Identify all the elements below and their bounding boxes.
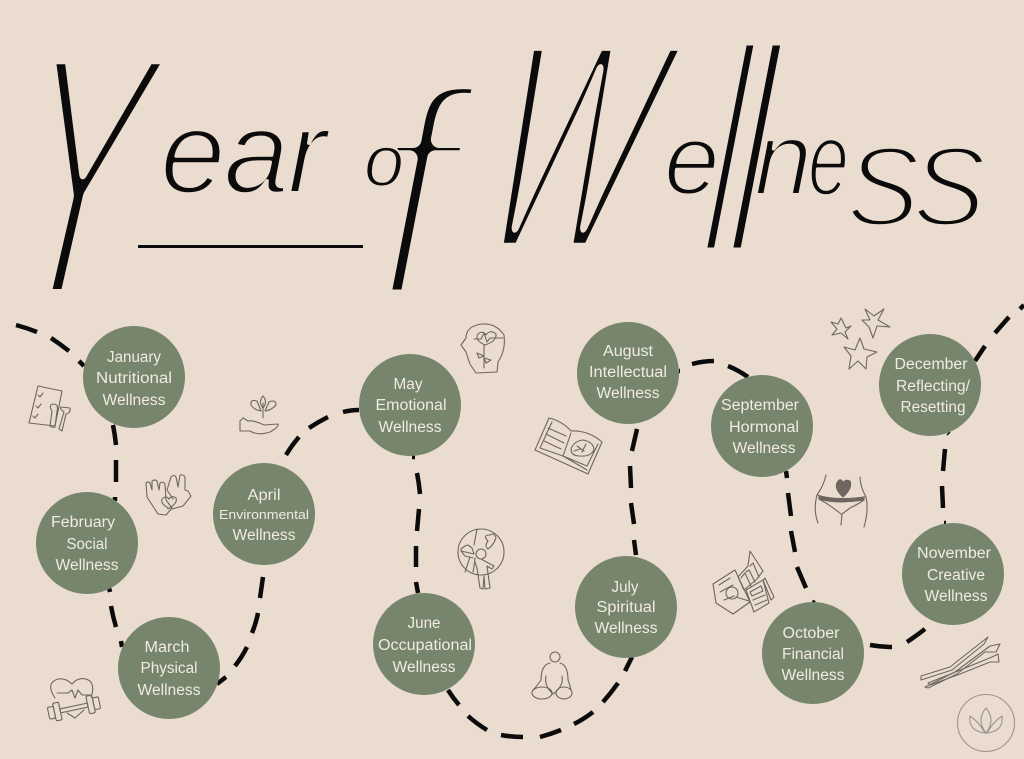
- step: July: Spiritual: [596, 599, 656, 616]
- step: July: [575, 556, 677, 658]
- step: November: [902, 523, 1004, 625]
- step: May: May: [394, 376, 423, 393]
- step: July: July: [612, 579, 639, 596]
- step: January: January: [107, 349, 161, 366]
- icon: belly with heart: [815, 475, 867, 527]
- step: August: [577, 322, 679, 424]
- step: April: [213, 463, 315, 565]
- step: June: Wellness: [392, 659, 456, 676]
- step: May: Wellness: [378, 419, 442, 436]
- step: October: Financial: [782, 646, 844, 663]
- step: September: Hormonal: [729, 419, 799, 436]
- step: November: November: [917, 545, 991, 562]
- icon: work-life balance: [458, 529, 504, 589]
- step: February: Wellness: [56, 557, 119, 574]
- step: October: [762, 602, 864, 704]
- icon: checklist and cutlery: [29, 386, 70, 431]
- step: November: Wellness: [924, 588, 988, 605]
- step: August: Wellness: [596, 385, 660, 402]
- icon: three stars: [831, 309, 890, 369]
- step: June: [373, 593, 475, 695]
- step: August: August: [603, 343, 654, 360]
- dashed path: [16, 305, 1024, 737]
- step: January: Nutritional: [96, 370, 172, 387]
- icon: meditation figure: [532, 652, 572, 699]
- title: ss: [848, 90, 986, 258]
- step: December: Reflecting/: [896, 378, 971, 395]
- step: December: Resetting: [900, 399, 966, 416]
- step: December: December: [894, 356, 968, 373]
- step: September: September: [721, 397, 799, 414]
- title: n: [754, 101, 812, 218]
- title: e: [664, 104, 720, 216]
- step: October: October: [782, 625, 840, 642]
- icon: heart with dumbbell: [47, 679, 101, 722]
- icon: head with heart flower: [461, 324, 504, 373]
- step: July: Wellness: [594, 620, 658, 637]
- step: June: June: [408, 615, 440, 632]
- step: March: [118, 617, 220, 719]
- step: December: [879, 334, 981, 436]
- title: ear: [160, 87, 331, 219]
- step: March: March: [144, 639, 190, 656]
- step: January: [83, 326, 185, 428]
- step: October: Wellness: [782, 667, 845, 684]
- icon: finance documents and calculator: [713, 551, 774, 614]
- step: November: Creative: [927, 567, 985, 584]
- step: January: Wellness: [102, 392, 166, 409]
- step: February: Social: [66, 536, 108, 553]
- step: September: [711, 375, 813, 477]
- icon: paint brushes: [921, 637, 1000, 688]
- icon: hands holding heart: [146, 475, 191, 515]
- title: o: [364, 122, 404, 202]
- step: February: [36, 492, 138, 594]
- step: March: Physical: [140, 660, 198, 677]
- step: May: Emotional: [376, 397, 446, 414]
- step: June: Occupational: [378, 637, 472, 654]
- icon: open book with brain: [535, 418, 602, 474]
- step: September: Wellness: [732, 440, 796, 457]
- step: April: Environmental: [219, 507, 309, 522]
- title: e: [808, 101, 849, 218]
- step: April: Wellness: [232, 527, 296, 544]
- icon: plant in hand: [240, 396, 278, 434]
- title underline: [138, 245, 363, 248]
- title: f: [372, 26, 484, 362]
- step: April: April: [248, 487, 280, 504]
- icon: lotus logo: [958, 694, 1014, 752]
- step: March: Wellness: [138, 682, 201, 699]
- title: [0, 0, 986, 372]
- step: May: [359, 354, 461, 456]
- step: August: Intellectual: [589, 364, 667, 381]
- step: February: February: [51, 514, 115, 531]
